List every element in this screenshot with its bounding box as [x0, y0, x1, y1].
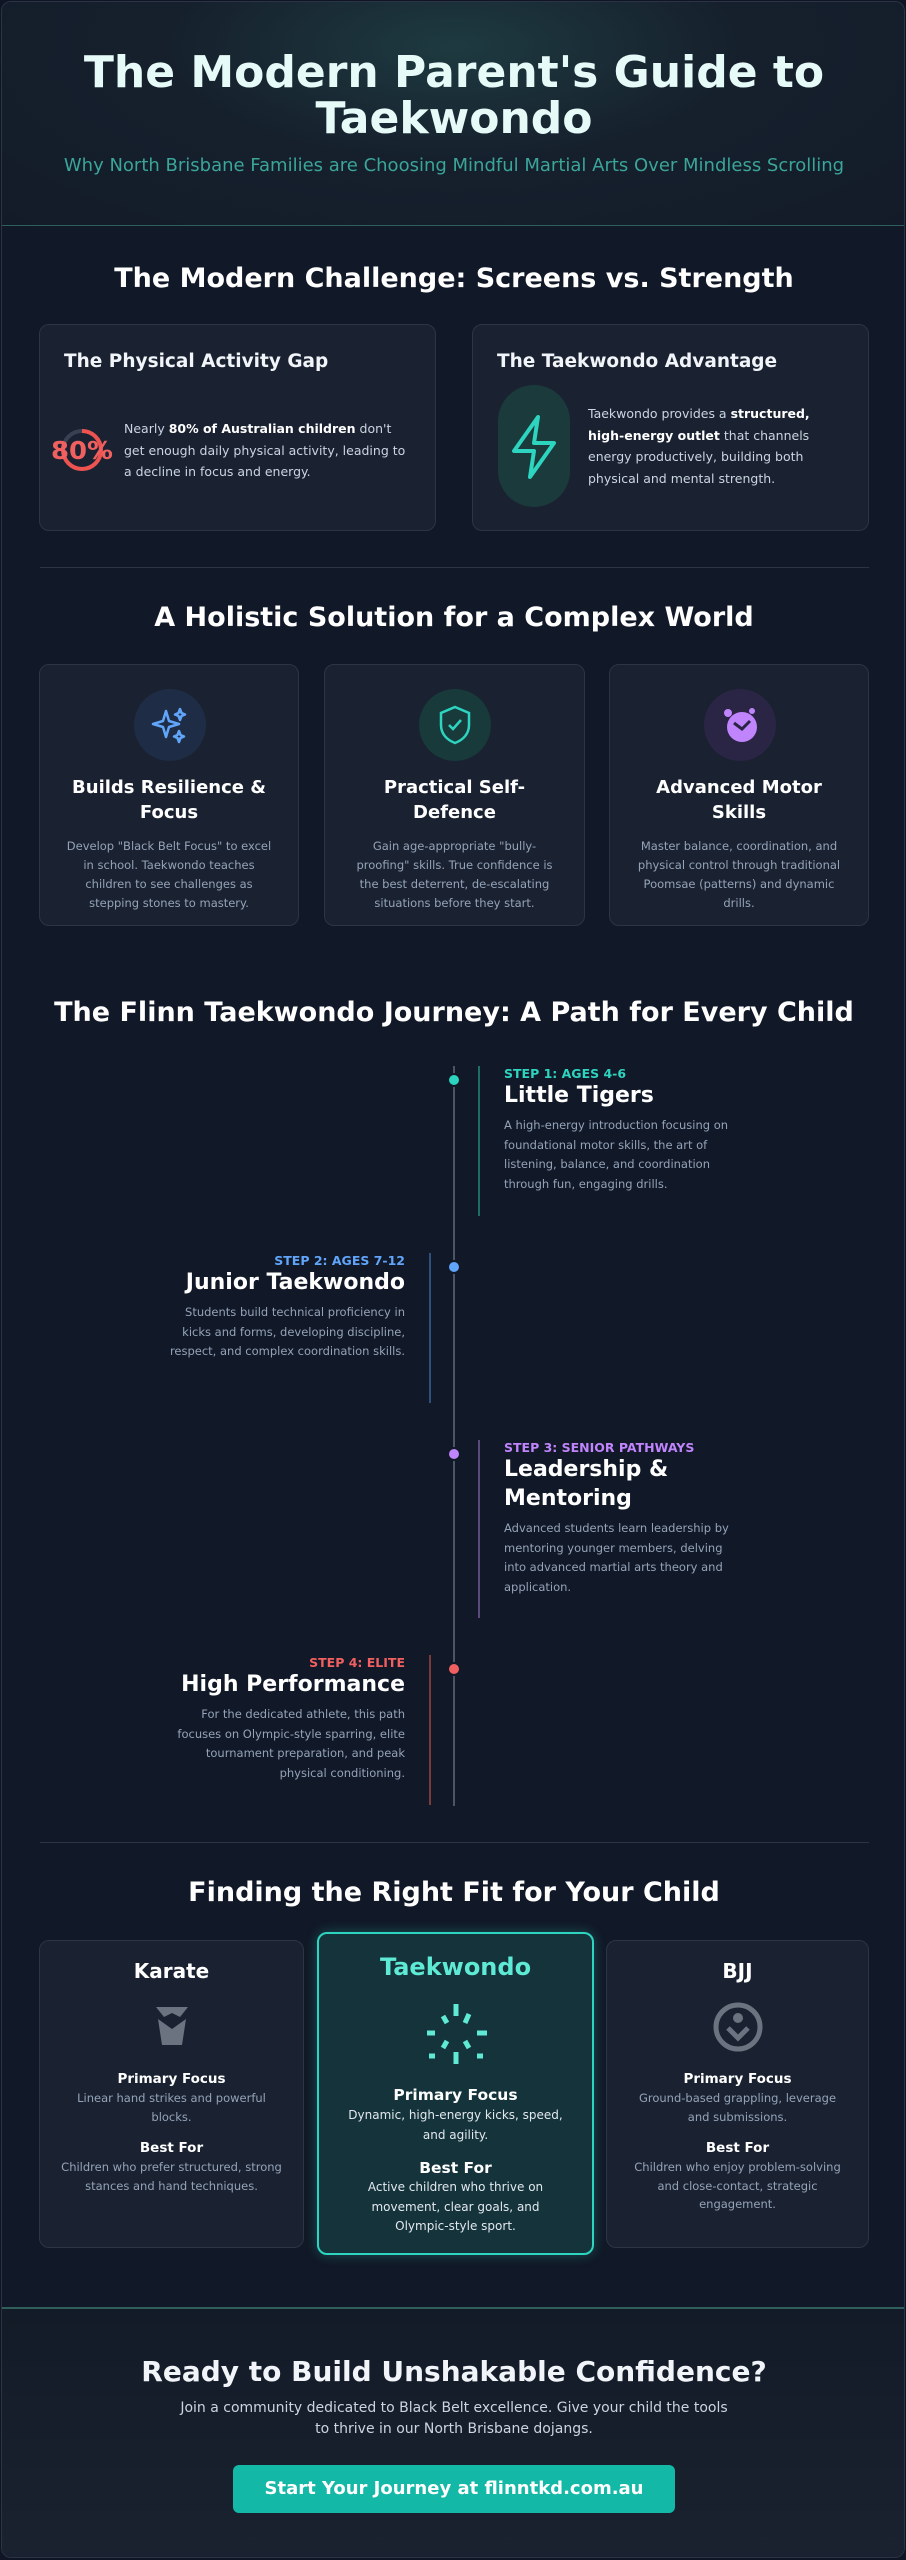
panel: self-defence [324, 664, 585, 926]
step 1: Little Tigers [504, 1083, 654, 1108]
footer [2, 2307, 906, 2560]
step 2: Students build technical proficiency in kicks and forms, developing discipline, respect, and complex coordination skills. [170, 1305, 405, 1358]
text: Nearly 80% of Australian children don't get enough daily physical activity, leading to a decline in focus and energy. [124, 421, 405, 479]
step 4: STEP 4: ELITE [309, 1655, 405, 1670]
panel: bjj: Best For [706, 2140, 769, 2156]
step 1: STEP 1: AGES 4-6 [504, 1066, 626, 1081]
step 3: Mentoring [504, 1486, 632, 1511]
cta text: Join a community dedicated to Black Belt excellence. Give your child the tools to thrive in our North Brisbane dojangs. [180, 2400, 728, 2437]
step 1 [478, 1066, 748, 1216]
panel: physical activity gap [39, 324, 436, 531]
icon: sparkles [134, 689, 206, 761]
panel: karate: Children who prefer structured, strong stances and hand techniques. [61, 2160, 282, 2192]
panel: bjj: Primary Focus [683, 2071, 792, 2087]
cta title: Ready to Build Unshakable Confidence? [141, 2355, 767, 2388]
text: Taekwondo provides a structured, high-energy outlet that channels energy productively, building both physical and mental strength. [588, 406, 810, 486]
panel: motor skills: Skills [712, 802, 766, 823]
dots [447, 1073, 461, 1087]
button: Start Your Journey at flinntkd.com.au [264, 2478, 644, 2499]
icon: motor [704, 689, 776, 761]
step 4: High Performance [181, 1672, 405, 1697]
step 2: Junior Taekwondo [186, 1270, 405, 1295]
panel: taekwondo advantage [472, 324, 869, 531]
icon: 80% ring [51, 429, 113, 471]
section title: holistic: A Holistic Solution for a Complex World [154, 602, 754, 633]
icon: taekwondo burst [427, 2004, 487, 2064]
icon: 80% ring: 80% [51, 436, 113, 465]
panel: karate [39, 1940, 304, 2248]
panel: resilience: Develop "Black Belt Focus" to excel in school. Taekwondo teaches children to see challenges as stepping stones to mastery. [67, 839, 271, 910]
timeline line [453, 1066, 455, 1806]
panel: motor skills: Master balance, coordination, and physical control through traditional Poomsae (patterns) and dynamic drills. [638, 839, 840, 910]
panel: resilience: Builds Resilience & [72, 777, 266, 798]
panel: bjj: BJJ [722, 1959, 753, 1983]
panel: motor skills: Advanced Motor [656, 777, 822, 798]
icon: lightning [498, 385, 570, 507]
title: The Modern Parent's Guide to [84, 47, 824, 98]
icon: bjj [714, 2002, 762, 2052]
step 4: For the dedicated athlete, this path focuses on Olympic-style sparring, elite tournament preparation, and peak physical conditioning. [177, 1707, 405, 1780]
step 3: Leadership & [504, 1457, 668, 1482]
section title: modern challenge: The Modern Challenge: Screens vs. Strength [114, 263, 794, 294]
panel: bjj: Ground-based grappling, leverage and submissions. [639, 2091, 836, 2124]
title [84, 47, 824, 144]
header [2, 2, 906, 226]
panel: karate: Karate [134, 1959, 209, 1983]
panel: taekwondo: Active children who thrive on movement, clear goals, and Olympic-style sport. [368, 2180, 543, 2233]
panel: physical activity gap: The Physical Activity Gap [64, 351, 328, 372]
panel: karate: Linear hand strikes and powerful blocks. [77, 2091, 266, 2124]
step 1: A high-energy introduction focusing on foundational motor skills, the art of listening, balance, and coordination through fun, engaging drills. [504, 1118, 728, 1190]
panel: motor skills [609, 664, 869, 926]
panel: taekwondo: Best For [419, 2159, 492, 2177]
panel: resilience [39, 664, 299, 926]
step 2 [162, 1253, 431, 1403]
panel: taekwondo: Dynamic, high-energy kicks, speed, and agility. [348, 2108, 563, 2142]
panel: resilience: Focus [140, 802, 198, 823]
panel: bjj [606, 1940, 869, 2248]
subtitle: Why North Brisbane Families are Choosing Mindful Martial Arts Over Mindless Scrolling [64, 155, 844, 176]
button [233, 2465, 675, 2513]
step 4 [162, 1655, 431, 1805]
panel: self-defence: Practical Self- [384, 777, 525, 798]
panel: taekwondo: Primary Focus [393, 2086, 518, 2104]
panel: karate: Primary Focus [117, 2071, 226, 2087]
section title: journey: The Flinn Taekwondo Journey: A Path for Every Child [54, 997, 854, 1028]
panel: karate: Best For [140, 2140, 203, 2156]
panel: taekwondo: Taekwondo [380, 1953, 531, 1981]
icon: shield [419, 689, 491, 761]
icon: karate [156, 2007, 188, 2045]
title: Taekwondo [315, 93, 593, 144]
step 3 [478, 1440, 748, 1618]
panel: taekwondo advantage: The Taekwondo Advantage [497, 351, 777, 372]
panel: self-defence: Gain age-appropriate "bully-proofing" skills. True confidence is the best deterrent, de-escalating situations before they start. [356, 839, 553, 910]
step 3: Advanced students learn leadership by mentoring younger members, delving into advanced martial arts theory and application. [504, 1521, 729, 1594]
section title: fit: Finding the Right Fit for Your Child [188, 1877, 720, 1908]
panel: bjj: Children who enjoy problem-solving and close-contact, strategic engagement. [634, 2160, 841, 2211]
step 2: STEP 2: AGES 7-12 [274, 1253, 405, 1268]
panel: taekwondo [317, 1932, 594, 2255]
step 3: STEP 3: SENIOR PATHWAYS [504, 1440, 694, 1455]
panel: self-defence: Defence [413, 802, 496, 823]
